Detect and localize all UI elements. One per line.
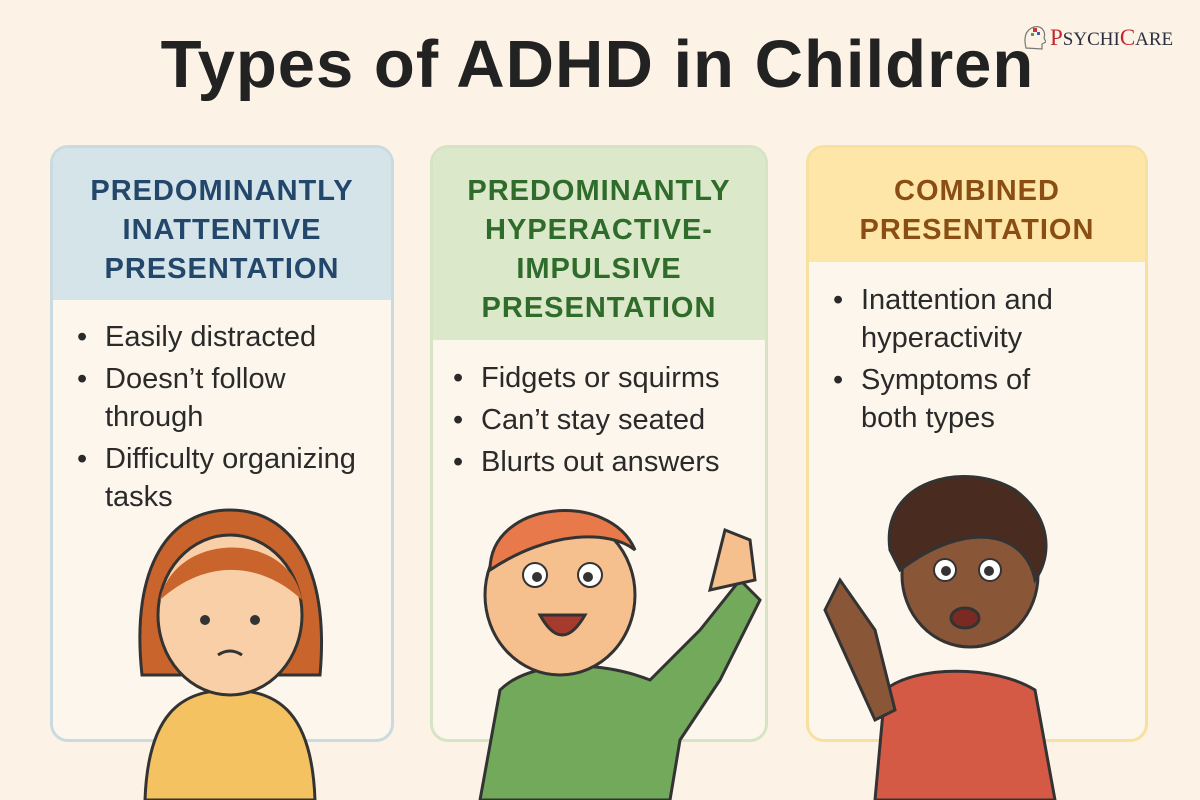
list: inattentive symptoms: Difficulty organizing tasks <box>105 443 356 513</box>
header: hyperactive: HYPERACTIVE- <box>485 214 713 246</box>
illustration: girl <box>138 508 324 800</box>
list: combined symptoms: both types <box>861 402 995 434</box>
list: inattentive symptoms: Doesn’t follow <box>105 363 286 395</box>
list: hyperactive symptoms: Blurts out answers <box>481 446 720 478</box>
illustration: boy waving <box>478 509 762 800</box>
header: combined <box>809 148 1145 262</box>
header: hyperactive: PRESENTATION <box>482 292 716 324</box>
list: combined symptoms <box>834 284 1053 434</box>
list: inattentive symptoms <box>78 321 356 513</box>
header: inattentive: PRESENTATION <box>105 253 339 285</box>
panel: inattentive <box>50 145 394 742</box>
list: combined symptoms: Symptoms of <box>861 364 1030 396</box>
panel: combined <box>806 145 1148 742</box>
logo: PSYCHICARE <box>1050 25 1173 50</box>
header: inattentive: PREDOMINANTLY <box>90 175 354 207</box>
header: hyperactive: IMPULSIVE <box>516 253 682 285</box>
list: inattentive symptoms: Easily distracted <box>105 321 316 353</box>
header: inattentive: INATTENTIVE <box>123 214 321 246</box>
header: hyperactive: PREDOMINANTLY <box>467 175 731 207</box>
list: inattentive symptoms: through <box>105 401 203 433</box>
header: combined: PRESENTATION <box>860 214 1094 246</box>
header: inattentive <box>53 148 391 300</box>
list: hyperactive symptoms: Can’t stay seated <box>481 404 705 436</box>
title: Types of ADHD in Children <box>161 27 1034 102</box>
list: hyperactive symptoms <box>454 362 720 478</box>
header: combined: COMBINED <box>894 175 1060 207</box>
illustration: boy <box>823 475 1056 800</box>
list: hyperactive symptoms: Fidgets or squirms <box>481 362 720 394</box>
list: combined symptoms: Inattention and hyperactivity <box>861 284 1053 354</box>
header: hyperactive <box>433 148 765 340</box>
panel: hyperactive <box>430 145 768 742</box>
